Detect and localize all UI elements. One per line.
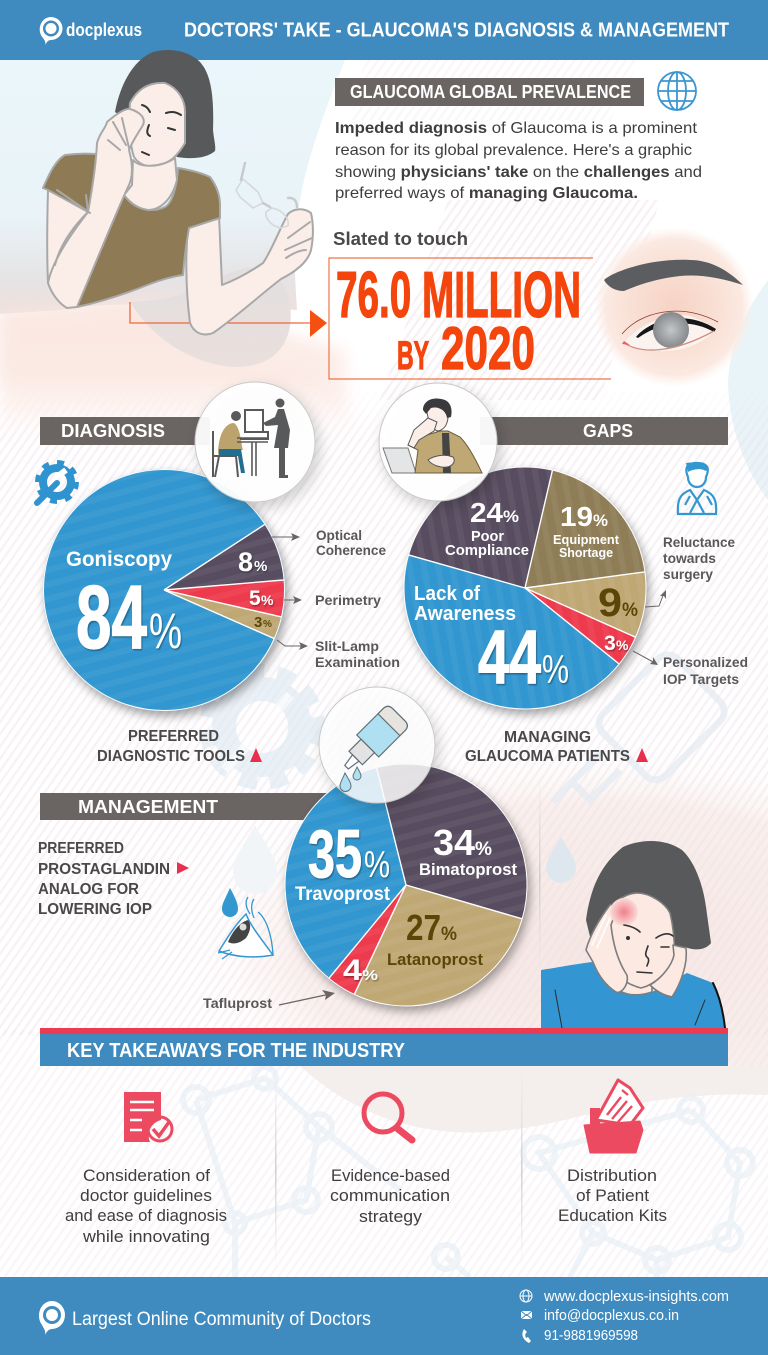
sore eye	[610, 898, 638, 926]
value: 4%: 4	[343, 954, 362, 987]
text	[65, 1167, 227, 1246]
face	[129, 83, 185, 166]
value: 19% equipment shortage: 19	[560, 501, 593, 532]
intro paragraph: preferred ways of managing Glaucoma.	[335, 185, 638, 202]
illustration: woman rubbing eye	[43, 50, 313, 335]
icon: doctor	[678, 462, 716, 514]
watermark: dropper bottle	[553, 649, 730, 802]
value: 34% bimatoprost	[419, 822, 517, 879]
intro paragraph: showing physicians' take on the challenges and	[335, 164, 702, 181]
value: 44%: %	[542, 648, 569, 692]
text: and ease of diagnosis	[65, 1207, 227, 1225]
heading	[335, 78, 644, 106]
illustration: woman with eye pain	[541, 841, 725, 1028]
year: 2020	[441, 315, 535, 382]
section: diagnosis	[37, 382, 400, 765]
label: optical coherence: Optical	[316, 528, 362, 543]
value: 3%	[604, 632, 629, 655]
value: 27% latanoprost: %	[441, 924, 457, 945]
icon: document with check	[124, 1092, 172, 1142]
label: slit-lamp examination: Slit-Lamp	[315, 639, 379, 654]
label: reluctance towards surgery: surgery	[663, 567, 713, 582]
text: Evidence-based	[331, 1167, 450, 1185]
intro paragraph: Impeded diagnosis of Glaucoma is a prominent	[335, 120, 698, 137]
heading bar	[40, 793, 330, 820]
label: goniscopy: Goniscopy	[66, 548, 172, 571]
subheading: Slated to touch	[333, 229, 468, 249]
text: communication	[330, 1187, 450, 1205]
section: key takeaways	[40, 1028, 728, 1246]
caption: managing glaucoma patients: GLAUCOMA PATIENTS	[465, 748, 630, 765]
pie chart: managing glaucoma patients	[404, 467, 646, 709]
value: 19% equipment shortage: Equipment	[553, 532, 620, 547]
spectacles	[236, 163, 297, 228]
tagline: Largest Online Community of Doctors	[72, 1309, 371, 1330]
icon: eye with drop	[218, 888, 273, 959]
label: lack of awareness: Awareness	[414, 603, 516, 625]
icon: tired doctor circle	[379, 383, 497, 501]
value: 9%	[598, 581, 638, 625]
big number: 76.0 MILLION	[336, 258, 581, 331]
caption: preferred prostaglandin analog: LOWERING IOP	[38, 901, 152, 918]
value: 84%: 84	[76, 568, 147, 668]
label: personalized iop targets	[633, 651, 748, 687]
year	[397, 315, 535, 382]
heading bar	[480, 417, 728, 445]
heading bar	[40, 1028, 728, 1066]
heading bar: GAPS	[583, 421, 633, 441]
value: 24% poor compliance: %	[503, 507, 519, 526]
value: 5%: %	[261, 592, 274, 608]
hair	[115, 50, 215, 158]
value: 24% poor compliance: Poor	[471, 528, 504, 545]
logo: docplexus: docplexus	[66, 20, 142, 40]
value: 44%: 44	[478, 615, 541, 700]
value: 8%: %	[254, 558, 267, 575]
value: 8%: 8	[238, 547, 253, 577]
label: personalized iop targets: Personalized	[663, 655, 748, 670]
caption: managing glaucoma patients: MANAGING	[504, 729, 591, 746]
label: perimetry: Perimetry	[315, 593, 382, 608]
value: 3%: %	[263, 619, 272, 630]
icon: folder with papers	[584, 1080, 643, 1153]
value: 34% bimatoprost: 34	[433, 822, 475, 863]
icon: magnifier	[364, 1094, 412, 1140]
text: of Patient	[576, 1187, 649, 1205]
section: global prevalence	[333, 72, 702, 249]
label: optical coherence	[272, 528, 386, 558]
value: 4%: %	[362, 967, 378, 984]
text: Consideration of	[83, 1167, 210, 1185]
footer bar	[0, 1277, 768, 1355]
text	[558, 1167, 667, 1225]
watermark: gear	[206, 671, 318, 783]
takeaway: guidelines	[65, 1092, 227, 1246]
value: 19% equipment shortage: %	[593, 511, 608, 530]
phone: 91-9881969598	[544, 1328, 638, 1344]
icon: gear and wrench	[37, 462, 76, 503]
text: strategy	[359, 1208, 423, 1226]
value: 35% travoprost	[295, 816, 391, 905]
value: 3%: 3	[604, 632, 616, 655]
label: reluctance towards surgery	[645, 535, 735, 607]
intro paragraph	[335, 120, 702, 202]
text	[330, 1167, 450, 1226]
label: tafluprost: Tafluprost	[203, 996, 273, 1011]
heading bar	[40, 417, 210, 445]
label: perimetry	[284, 593, 382, 608]
caption: preferred prostaglandin analog	[38, 840, 189, 918]
hair	[586, 841, 711, 949]
value: 27% latanoprost	[387, 907, 483, 969]
website: www.docplexus-insights.com	[543, 1289, 729, 1305]
icon: globe	[658, 72, 696, 110]
pie chart: prostaglandin analogs	[285, 764, 527, 1006]
neck	[124, 158, 177, 210]
caption: preferred prostaglandin analog: PREFERRED	[38, 840, 124, 857]
label: personalized iop targets: IOP Targets	[663, 672, 739, 687]
value: 27% latanoprost: Latanoprost	[387, 950, 483, 969]
upper arm	[47, 190, 95, 300]
text: Distribution	[567, 1167, 657, 1185]
face	[605, 893, 675, 988]
header bar	[0, 0, 768, 60]
value: 3%	[254, 614, 272, 631]
neck	[618, 975, 652, 995]
arrow: woman to statistic	[130, 302, 327, 337]
value: 8%	[238, 547, 267, 577]
text: Education Kits	[558, 1207, 667, 1225]
label: optical coherence: Coherence	[316, 543, 386, 558]
heading bar: KEY TAKEAWAYS FOR THE INDUSTRY	[67, 1040, 406, 1062]
watermark: drops	[233, 825, 576, 894]
value: 35% travoprost: Travoprost	[295, 884, 391, 905]
caption: preferred prostaglandin analog: ANALOG FOR	[38, 881, 139, 898]
label: reluctance towards surgery: towards	[663, 551, 716, 566]
statistic box	[329, 258, 611, 382]
right hand	[650, 945, 686, 997]
text: doctor guidelines	[80, 1187, 212, 1205]
caption: preferred diagnostic tools: DIAGNOSTIC TOOLS	[97, 748, 245, 765]
email: info@docplexus.co.in	[544, 1308, 679, 1324]
icon: eye drop bottle circle	[319, 687, 435, 803]
heading bar: MANAGEMENT	[78, 797, 218, 817]
contact details	[520, 1289, 729, 1344]
caption: preferred diagnostic tools	[97, 728, 262, 765]
value: 9%: %	[622, 600, 638, 621]
label: tafluprost	[203, 990, 335, 1011]
label: reluctance towards surgery: Reluctance	[663, 535, 735, 550]
label: slit-lamp examination	[277, 639, 400, 670]
section: management	[38, 687, 527, 1011]
right arm	[186, 209, 313, 335]
watermark: molecule network	[183, 1067, 753, 1277]
value: 3%: 3	[254, 614, 262, 631]
takeaway: education kits	[558, 1080, 667, 1225]
logo: tagline icon	[39, 1301, 65, 1335]
value: 24% poor compliance: Compliance	[445, 542, 529, 559]
shirt	[43, 154, 220, 307]
value: 35% travoprost: %	[364, 844, 390, 886]
label: lack of awareness	[414, 583, 516, 625]
year: BY	[397, 334, 429, 378]
value: 3%: %	[616, 637, 629, 653]
shirt	[541, 962, 725, 1028]
caption: preferred diagnostic tools: PREFERRED	[128, 728, 219, 745]
heading: GLAUCOMA GLOBAL PREVALENCE	[350, 82, 631, 102]
intro paragraph: reason for its global prevalence. Here's a graphic	[335, 142, 692, 159]
value: 34% bimatoprost: Bimatoprost	[419, 860, 517, 879]
value: 27% latanoprost: 27	[406, 907, 441, 948]
value: 35% travoprost: 35	[308, 816, 362, 892]
logo: docplexus	[40, 17, 142, 45]
caption: preferred prostaglandin analog: PROSTAGLANDIN	[38, 861, 170, 878]
icon: eye examination circle	[195, 382, 315, 502]
value: 19% equipment shortage	[553, 501, 620, 560]
value: 9%: 9	[598, 581, 622, 625]
value: 5%	[249, 587, 274, 610]
takeaway: communication	[330, 1094, 450, 1226]
section: gaps	[379, 383, 748, 765]
value: 4%	[343, 954, 378, 987]
value: 5%: 5	[249, 587, 261, 610]
label: lack of awareness: Lack of	[414, 583, 480, 605]
pie chart: preferred diagnostic tools	[43, 469, 285, 711]
text: while innovating	[82, 1228, 210, 1246]
value: 84%: %	[149, 603, 182, 659]
illustration: cataract eye	[594, 227, 754, 387]
label: slit-lamp examination: Examination	[315, 655, 400, 670]
forearm and hand	[48, 109, 144, 308]
left hand	[586, 904, 627, 992]
value: 34% bimatoprost: %	[475, 839, 492, 860]
value: 19% equipment shortage: Shortage	[559, 545, 613, 560]
heading bar: DIAGNOSIS	[61, 421, 165, 441]
value: 24% poor compliance	[445, 497, 529, 559]
value: 24% poor compliance: 24	[470, 497, 503, 528]
caption: managing glaucoma patients	[465, 729, 648, 765]
dividers	[275, 775, 540, 1270]
